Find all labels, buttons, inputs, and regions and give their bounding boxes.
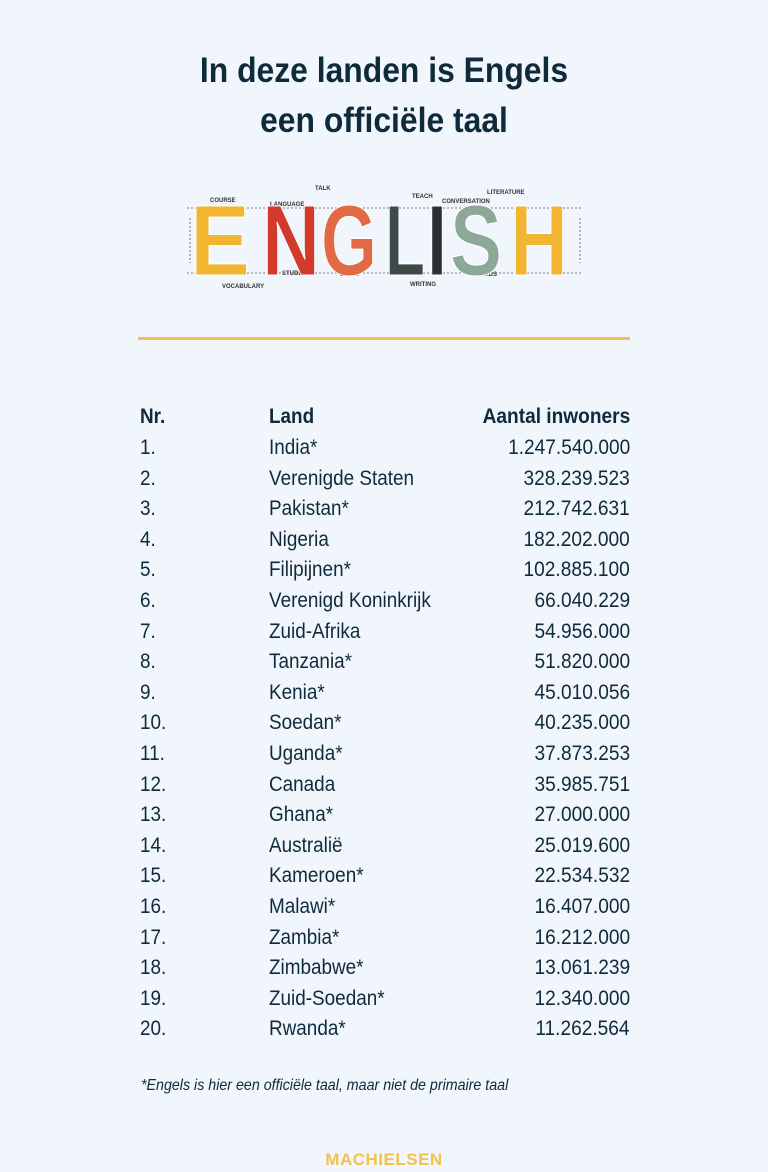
table: 182.202.000 — [524, 528, 630, 551]
table: Rwanda* — [269, 1017, 346, 1040]
logo: MACHIELSEN — [325, 1150, 443, 1169]
table: 8. — [140, 650, 156, 673]
title: In deze landen is Engels — [200, 51, 568, 90]
table: 15. — [140, 864, 166, 887]
table: Tanzania* — [269, 650, 352, 673]
table header — [140, 405, 630, 428]
table: 1. — [140, 436, 156, 459]
table: 3. — [140, 497, 156, 520]
table header: Aantal inwoners — [482, 405, 630, 428]
table: 20. — [140, 1017, 166, 1040]
footnote: *Engels is hier een officiële taal, maar niet de primaire taal — [141, 1077, 508, 1094]
table: Zuid-Soedan* — [269, 987, 385, 1010]
table: 1.247.540.000 — [508, 436, 630, 459]
table: 11.262.564 — [536, 1017, 630, 1040]
table: 25.019.600 — [534, 834, 630, 857]
table: 9. — [140, 681, 156, 704]
illustration: English — [187, 185, 581, 293]
table: Zimbabwe* — [269, 956, 364, 979]
table: 4. — [140, 528, 156, 551]
table: 14. — [140, 834, 166, 857]
table: Kameroen* — [269, 864, 364, 887]
table: 7. — [140, 620, 156, 643]
illustration: English: TALK — [315, 186, 331, 192]
table: Nigeria — [269, 528, 329, 551]
table: India* — [269, 436, 317, 459]
table: 22.534.532 — [534, 864, 630, 887]
table: Pakistan* — [269, 497, 349, 520]
table: 102.885.100 — [524, 558, 630, 581]
illustration: English: CONVERSATION — [442, 199, 490, 205]
title: een officiële taal — [260, 101, 508, 140]
table: Zambia* — [269, 926, 339, 949]
illustration: English: COURSE — [210, 198, 236, 204]
table: 19. — [140, 987, 166, 1010]
table: 11. — [140, 742, 165, 765]
table: 2. — [140, 467, 156, 490]
table header: Nr. — [140, 405, 165, 428]
table: 17. — [140, 926, 166, 949]
table header: Land — [269, 405, 314, 428]
table: Zuid-Afrika — [269, 620, 360, 643]
illustration: English: STUDENT — [282, 271, 311, 277]
table: Filipijnen* — [269, 558, 351, 581]
table: Kenia* — [269, 681, 325, 704]
table: 40.235.000 — [534, 711, 630, 734]
table: 45.010.056 — [534, 681, 630, 704]
illustration: English: VOCABULARY — [222, 284, 264, 290]
illustration: English: TEACH — [412, 194, 433, 200]
table: 27.000.000 — [534, 803, 630, 826]
table: Verenigde Staten — [269, 467, 414, 490]
title — [200, 51, 568, 140]
table: 10. — [140, 711, 166, 734]
table: 12. — [140, 773, 166, 796]
table: 37.873.253 — [534, 742, 630, 765]
table: 18. — [140, 956, 166, 979]
table: 5. — [140, 558, 156, 581]
divider line — [138, 337, 630, 340]
table: 13.061.239 — [534, 956, 630, 979]
table: Canada — [269, 773, 335, 796]
table: 54.956.000 — [534, 620, 630, 643]
table: 12.340.000 — [534, 987, 630, 1010]
table: Australië — [269, 834, 343, 857]
illustration: English: WORDS — [474, 272, 497, 278]
illustration: English: WRITING — [410, 282, 436, 288]
table: 212.742.631 — [524, 497, 630, 520]
illustration: English: LITERATURE — [487, 190, 525, 196]
table: Uganda* — [269, 742, 343, 765]
table: 16.212.000 — [534, 926, 630, 949]
table: 328.239.523 — [524, 467, 630, 490]
table: 51.820.000 — [534, 650, 630, 673]
illustration: English: LANGUAGE — [270, 202, 304, 208]
table: 6. — [140, 589, 156, 612]
table: 16. — [140, 895, 166, 918]
table: Soedan* — [269, 711, 342, 734]
table: 16.407.000 — [534, 895, 630, 918]
table: 35.985.751 — [534, 773, 630, 796]
table: 66.040.229 — [534, 589, 630, 612]
table: 13. — [140, 803, 166, 826]
illustration: English: ESSAY — [340, 272, 360, 278]
table: Ghana* — [269, 803, 333, 826]
table: Verenigd Koninkrijk — [269, 589, 431, 612]
table: Malawi* — [269, 895, 335, 918]
